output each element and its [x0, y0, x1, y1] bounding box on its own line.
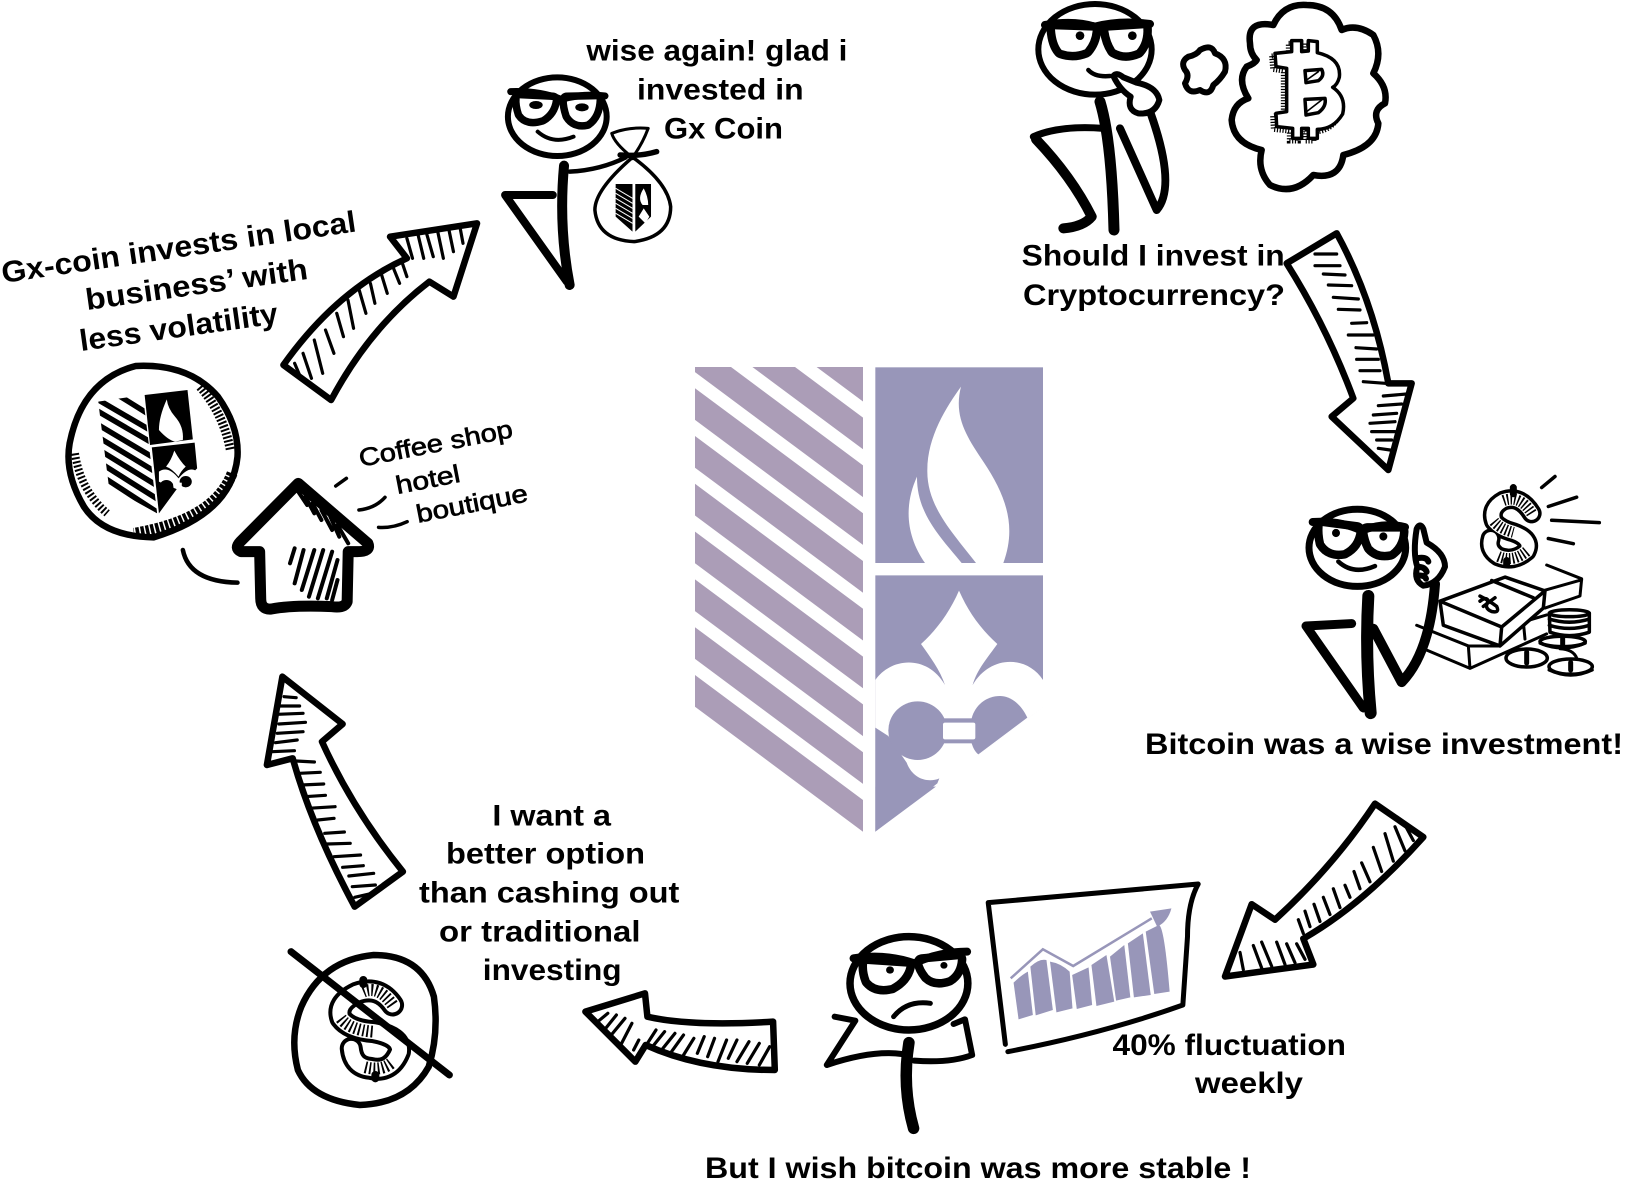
- thought cloud: [1232, 5, 1386, 189]
- body and arms: [1100, 102, 1114, 230]
- caption: Gx-coin invests locally: business’ with: [83, 253, 310, 317]
- caption: should I invest: Should I invest in: [1022, 240, 1285, 273]
- head: [1038, 4, 1152, 95]
- chart: fluctuating bars: [988, 884, 1198, 1052]
- slash: [291, 952, 449, 1075]
- coins: [1506, 610, 1592, 675]
- shield flame quadrant: [875, 367, 1043, 563]
- caption: wise again: [585, 35, 847, 145]
- glasses: [854, 952, 967, 986]
- smile: [1088, 70, 1110, 76]
- figure: thumbs up with money: [1306, 477, 1599, 713]
- caption: better option: investing: [483, 954, 622, 987]
- pointing hand: [1113, 74, 1159, 113]
- caption: 40% fluctuation weekly: [1112, 1029, 1346, 1100]
- small thought bubble: [1183, 47, 1226, 92]
- body and arms: [1367, 596, 1371, 713]
- caption: Gx-coin invests locally: [0, 206, 358, 358]
- arrow: down-left to chart: [1225, 804, 1423, 977]
- body and arm: [562, 166, 570, 285]
- caption: bitcoin wise investment: Bitcoin was a wise investment!: [1145, 728, 1623, 761]
- connector: coin to house: [183, 550, 237, 583]
- coin outline: [68, 366, 238, 537]
- arrow: up from dollar to house: [267, 677, 403, 907]
- figure: thinking about cryptocurrency: [1033, 4, 1386, 230]
- icon: house: [237, 478, 407, 609]
- coin ring: [294, 955, 436, 1105]
- money bag: [595, 128, 671, 242]
- dollar sign with rays: [1490, 477, 1599, 565]
- caption: better option: [419, 800, 679, 987]
- money stacks: [1417, 565, 1582, 668]
- shield left stripes: [695, 367, 863, 832]
- coin with shield: [68, 366, 238, 537]
- caption: business types: boutique: [414, 480, 530, 529]
- smile: [538, 132, 574, 140]
- arrow: up toward happy figure: [283, 223, 477, 400]
- body and arms: [906, 1043, 914, 1128]
- glasses: [1045, 22, 1150, 52]
- mini shield stripes: [98, 397, 158, 514]
- glasses: [511, 92, 605, 122]
- caption: better option: better option: [446, 837, 645, 870]
- dollar: [340, 980, 400, 1078]
- bitcoin symbol: [1272, 41, 1344, 141]
- caption: business types: hotel: [393, 460, 462, 500]
- chart frame: [988, 884, 1198, 1052]
- bag shield: [616, 184, 632, 232]
- figure: holding Gx Coin bag: [505, 77, 671, 285]
- caption: wish bitcoin more stable: But I wish bitcoin was more stable !: [705, 1152, 1251, 1185]
- caption: better option: than cashing out: [419, 876, 679, 909]
- head: [850, 937, 968, 1030]
- head: [508, 77, 607, 156]
- caption: better option: I want a: [492, 800, 611, 833]
- figure: worried about stability: [827, 937, 972, 1128]
- caption: 40% fluctuation weekly: weekly: [1194, 1067, 1303, 1100]
- caption: wise again: invested in: [637, 73, 804, 106]
- central shield logo: [695, 367, 1043, 832]
- trend arrow: [1011, 918, 1152, 978]
- mini shield panels: [145, 390, 193, 445]
- caption: wise again: Gx Coin: [664, 112, 783, 145]
- arrow: down from question to bitcoin figure: [1287, 233, 1412, 470]
- frown: [894, 1003, 930, 1017]
- caption: Gx-coin invests locally: Gx-coin invests in local: [0, 206, 358, 290]
- caption: Gx-coin invests locally: less volatility: [77, 297, 280, 358]
- business lines: [336, 478, 407, 527]
- shield fleur-de-lis quadrant: [875, 575, 1043, 832]
- caption: wise again: wise again! glad i: [585, 35, 847, 68]
- thumbs-up hand: [1415, 525, 1445, 586]
- caption: should I invest: Cryptocurrency?: [1023, 279, 1285, 312]
- caption: better option: or traditional: [439, 916, 640, 949]
- caption: business types: Coffee shop: [357, 415, 515, 473]
- caption: business types: [357, 415, 530, 529]
- icon: crossed out dollar: [291, 952, 449, 1105]
- head: [1309, 509, 1406, 586]
- bars: [1014, 925, 1170, 1019]
- smile: [1338, 562, 1375, 570]
- arrow: left toward better option: [585, 993, 775, 1070]
- caption: 40% fluctuation weekly: 40% fluctuation: [1112, 1029, 1346, 1062]
- glasses: [1313, 522, 1405, 552]
- caption: should I invest: [1022, 240, 1285, 312]
